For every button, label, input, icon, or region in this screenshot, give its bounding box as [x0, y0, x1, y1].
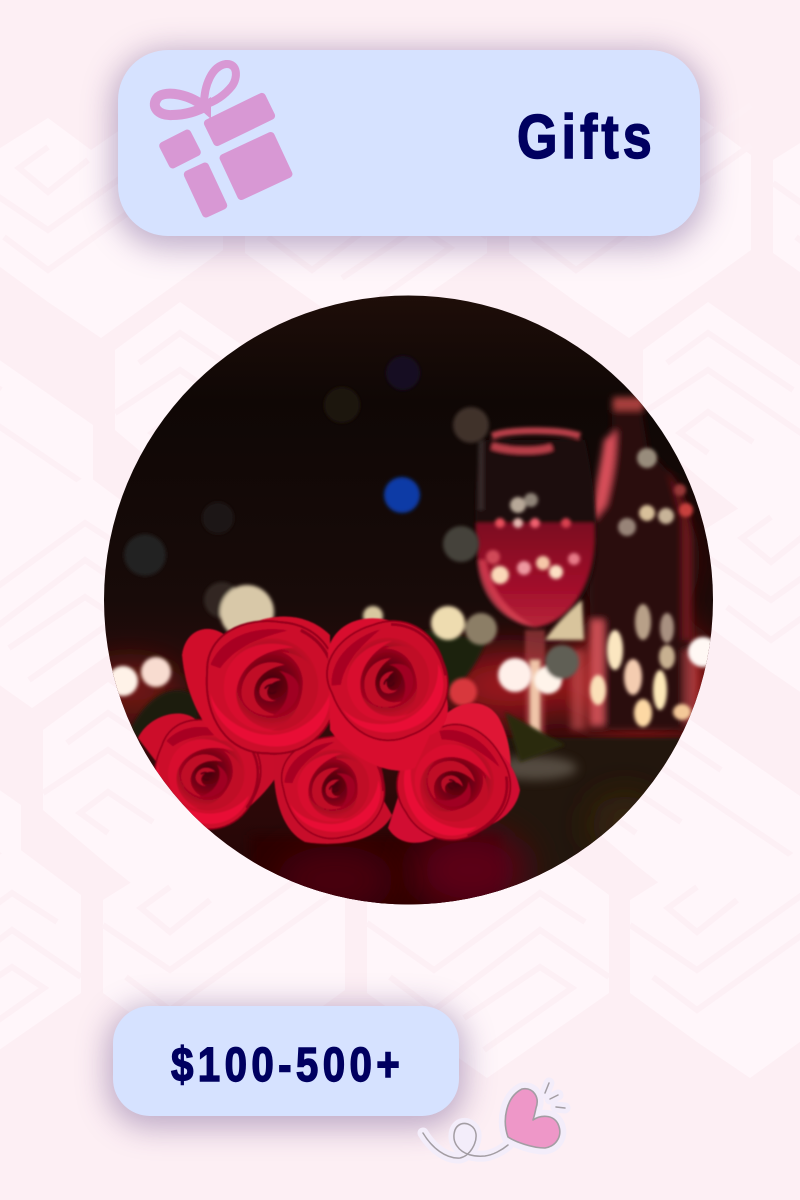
bottle — [578, 397, 692, 730]
bokeh lights — [108, 356, 718, 727]
red roses — [137, 616, 521, 845]
price text: $100-500+ — [171, 1039, 404, 1092]
base of glass — [493, 756, 577, 780]
sparks — [545, 1083, 565, 1108]
wine glass — [475, 431, 596, 780]
rose: top left — [182, 616, 342, 759]
icon: gift box — [150, 60, 292, 218]
table surface — [246, 736, 681, 904]
string — [423, 1123, 508, 1158]
rose: back petal right — [442, 702, 512, 766]
red glow behind the glass — [80, 490, 715, 735]
leaves — [130, 630, 565, 762]
heart — [505, 1089, 560, 1148]
panel: gifts header card — [118, 50, 700, 236]
rose: bottom left — [137, 712, 276, 831]
rose: top right — [326, 617, 450, 772]
heading: Gifts: Gifts — [517, 103, 656, 172]
photo: roses and wine in circle — [104, 296, 713, 904]
rose: bottom right — [387, 722, 521, 844]
sticker halo — [423, 1083, 565, 1158]
panel: price card — [113, 1006, 459, 1116]
rose: bottom middle — [274, 729, 392, 846]
photo background — [100, 290, 720, 910]
